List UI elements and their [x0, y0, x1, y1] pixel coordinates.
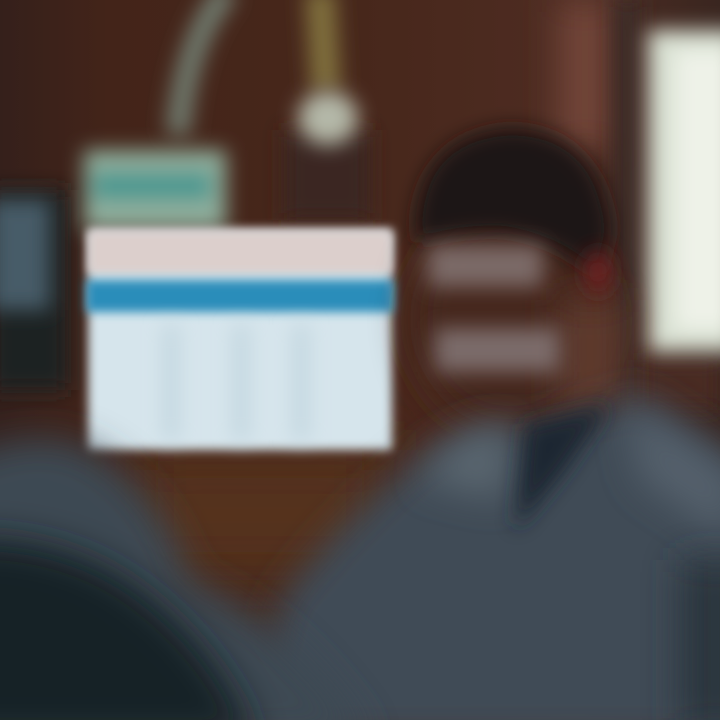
window: [648, 30, 720, 352]
card blue band: [86, 280, 394, 312]
hair: [415, 128, 612, 280]
foreground chart card: [86, 230, 394, 450]
body: [250, 395, 720, 720]
red accent: [585, 250, 611, 294]
card columns: [165, 325, 307, 440]
person: [250, 128, 720, 720]
neck and face: [410, 210, 610, 430]
foreground figure: [0, 439, 370, 720]
lower face block: [435, 328, 560, 372]
collar: [515, 405, 610, 530]
green card: [84, 150, 226, 230]
left background panel: [0, 190, 68, 390]
hanging lamp: [178, 0, 370, 220]
card body: [88, 230, 392, 450]
card header: [88, 230, 392, 274]
upper face block: [428, 245, 543, 287]
